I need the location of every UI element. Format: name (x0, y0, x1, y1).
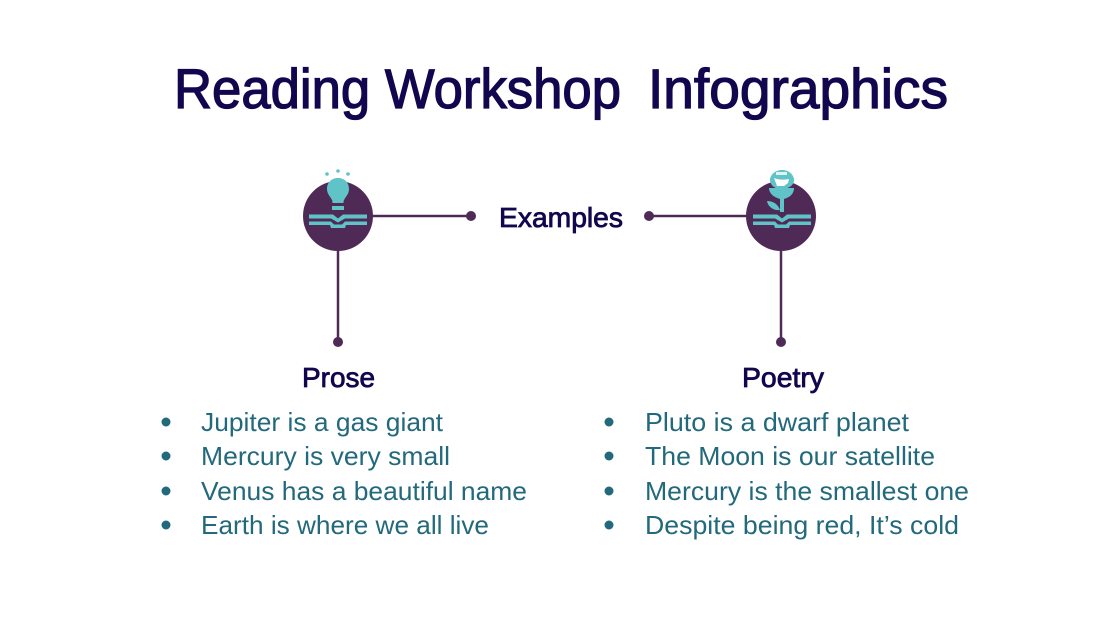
list: prose: Venus has a beautiful name (201, 476, 527, 506)
list: poetry (604, 407, 969, 540)
connector: poetry down (776, 250, 786, 347)
icon: book with rose (746, 170, 816, 251)
connector: prose down (333, 250, 343, 347)
title (174, 57, 948, 120)
heading: Poetry: Poetry (742, 362, 824, 393)
list: prose (162, 407, 527, 540)
list: poetry: Mercury is the smallest one (645, 476, 969, 506)
list: prose: Jupiter is a gas giant (201, 407, 444, 437)
icon: book with light bulb (303, 169, 373, 251)
heading: Prose: Prose (302, 362, 375, 393)
list: poetry: Despite being red, It’s cold (645, 510, 959, 540)
list: prose: Earth is where we all live (201, 510, 489, 540)
list: poetry: The Moon is our satellite (645, 441, 935, 471)
connector: poetry to examples (644, 211, 750, 221)
heading: Examples: Examples (499, 202, 623, 233)
list: poetry: Pluto is a dwarf planet (645, 407, 910, 437)
title: Reading Workshop (174, 57, 621, 120)
title: Infographics (648, 57, 948, 120)
list: prose: Mercury is very small (201, 441, 450, 471)
connector: prose to examples (370, 211, 476, 221)
